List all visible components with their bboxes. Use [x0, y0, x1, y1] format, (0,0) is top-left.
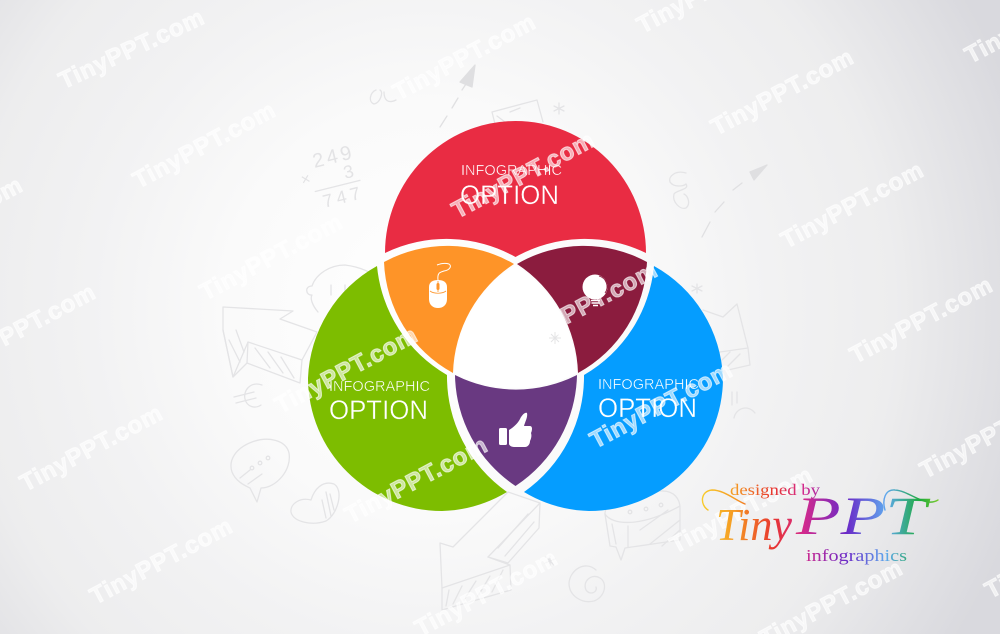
- label: blue option: INFOGRAPHIC: [598, 377, 699, 393]
- label: red option: [460, 163, 562, 210]
- doodle: multiplication sum: ×: [299, 171, 312, 189]
- watermarks: TinyPPT.com: [196, 208, 347, 306]
- doodle: face behind green circle: [307, 265, 378, 312]
- label: green option: INFOGRAPHIC: [329, 379, 430, 395]
- watermarks: TinyPPT.com: [271, 321, 422, 419]
- doodle: large left arrow: [223, 307, 317, 383]
- label: green option: OPTION: [329, 395, 428, 425]
- doodle: speech bubble: [231, 439, 289, 502]
- label: blue option: [598, 377, 699, 423]
- doodle: lower right speech bubble: [605, 491, 680, 560]
- circle segment: red: [385, 121, 646, 257]
- overlap: purple: [455, 375, 577, 486]
- watermarks: TinyPPT.com: [666, 461, 817, 559]
- doodle: top squiggle: [370, 90, 396, 104]
- doodle: star bottom: [545, 556, 555, 566]
- watermarks: TinyPPT.com: [448, 126, 599, 224]
- label: green option: [329, 379, 430, 425]
- doodle: multiplication sum: 249: [310, 141, 357, 173]
- doodle: spiral: [569, 566, 605, 602]
- icon: mouse: [429, 263, 450, 308]
- watermarks: TinyPPT.com: [586, 356, 737, 454]
- circle segment: blue: [524, 266, 723, 511]
- doodle: multiplication sum: 3: [341, 161, 356, 183]
- doodle: multiplication sum: 747: [321, 182, 366, 212]
- venn diagram: [308, 121, 723, 511]
- icon: thumbs up: [499, 413, 532, 447]
- watermarks: TinyPPT.com: [341, 431, 492, 529]
- overlap: maroon: [517, 246, 647, 373]
- watermarks: TinyPPT.com: [511, 256, 662, 354]
- overlap: orange: [384, 246, 514, 373]
- doodle: lower arrow: [440, 492, 540, 610]
- label: red option: INFOGRAPHIC: [461, 163, 562, 179]
- doodle: star right: [692, 284, 702, 293]
- label: red option: OPTION: [460, 180, 559, 210]
- doodle: right arrow: [703, 304, 750, 370]
- doodle: sad face: [732, 392, 755, 418]
- watermarks: TinyPPT.com: [846, 271, 997, 369]
- icon: light bulb: [582, 274, 608, 306]
- doodle: dashed arrow right: [702, 165, 767, 237]
- logo: PPT: PPT: [795, 486, 931, 546]
- doodle: star top: [554, 103, 564, 114]
- watermarks: TinyPPT.com: [777, 156, 928, 254]
- label: blue option: OPTION: [598, 393, 697, 423]
- logo: designed by TinyPPT infographics: [702, 482, 938, 565]
- watermarks: TinyPPT.com: [86, 512, 237, 610]
- background doodles: [223, 65, 767, 610]
- doodle: dashed arrow top: [440, 65, 475, 127]
- center: white with star: [454, 265, 577, 388]
- watermarks: TinyPPT.com: [16, 399, 167, 497]
- doodle: squiggle right: [670, 172, 689, 208]
- doodle: multiplication sum: [295, 141, 367, 215]
- watermarks: TinyPPT.com: [129, 96, 280, 194]
- logo: Tiny: Tiny: [716, 499, 793, 550]
- doodle: euro sign: [234, 384, 262, 407]
- logo: infographics: infographics: [806, 546, 907, 565]
- circle segment: green: [308, 266, 507, 511]
- watermarks: TinyPPT.com: [389, 8, 540, 106]
- doodle: envelope top: [492, 100, 543, 124]
- doodle: heart: [291, 483, 339, 523]
- watermarks: TinyPPT.com: [707, 43, 858, 141]
- watermarks: TinyPPT.com: [55, 4, 209, 95]
- logo: designed by: designed by: [730, 482, 820, 499]
- logo swashes: [702, 490, 938, 510]
